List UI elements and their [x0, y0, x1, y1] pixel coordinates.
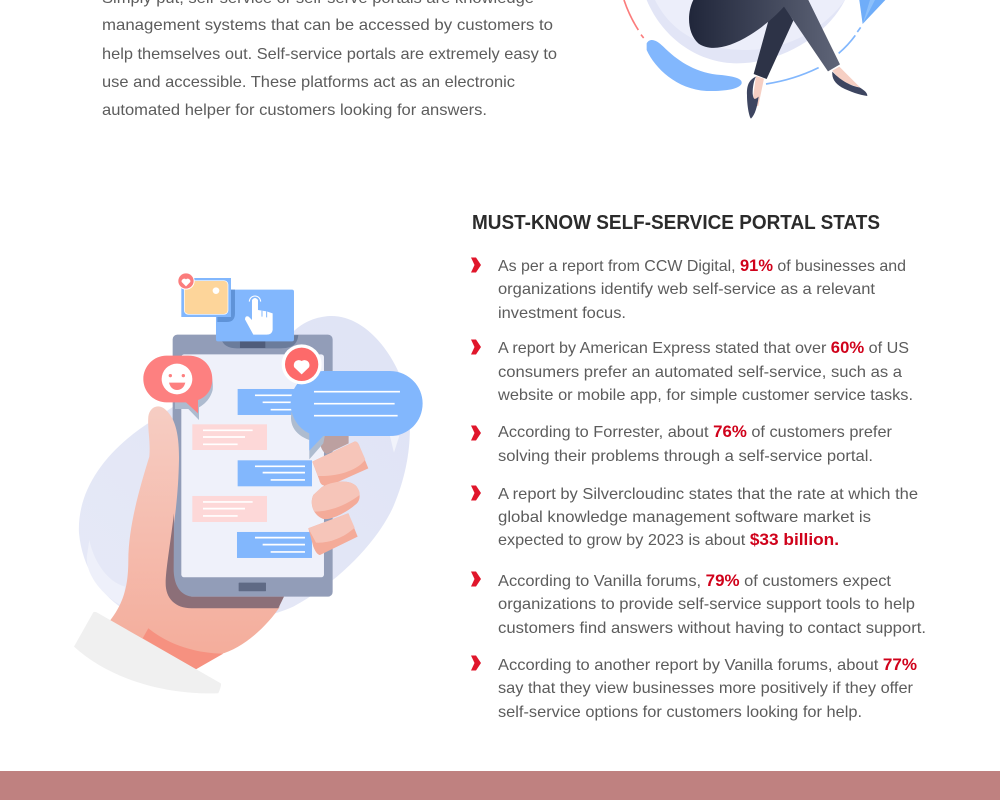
- blue message 1: [238, 389, 312, 415]
- stat: $33 billion: global knowledge management software market is: [498, 509, 871, 526]
- stat: 79%: [471, 572, 926, 637]
- sleeve: [74, 612, 221, 693]
- intro paragraph: management systems that can be accessed by customers to: [102, 17, 553, 34]
- back leg: [754, 5, 793, 79]
- stat: 60%: website or mobile app, for simple customer service tasks.: [497, 387, 913, 404]
- stat: 79%: customers find answers without having to contact support.: [498, 620, 926, 637]
- red orbit arc: [624, 0, 644, 38]
- phone body: [173, 335, 333, 597]
- pink message 1: [192, 424, 267, 450]
- top blue card with tap icon: [216, 290, 294, 341]
- intro paragraph: [102, 0, 557, 119]
- intro paragraph: use and accessible. These platforms act as an electronic: [102, 74, 515, 91]
- illustration: seated woman with orbit arcs: [624, 0, 885, 119]
- thigh and front leg: [689, 0, 840, 71]
- hand: [110, 406, 280, 669]
- top blue card shadow: [222, 335, 298, 348]
- stat: 76%: [471, 423, 893, 465]
- stat: 76%: solving their problems through a self-service portal.: [498, 448, 873, 465]
- stat: 60%: [471, 339, 913, 404]
- background blob: [79, 316, 410, 624]
- red top: [692, 0, 707, 12]
- bullet chevron: [471, 340, 481, 354]
- illustration: hand holding phone: [74, 272, 423, 693]
- blue chat bubble: [291, 371, 423, 451]
- stat: 60%: A report by American Express stated that over 60% of US: [498, 339, 909, 357]
- stat: 91%: organizations identify web self-service as a relevant: [498, 281, 876, 298]
- blue orbit arc: [766, 27, 861, 84]
- stat: 77%: self-service options for customers looking for help.: [498, 704, 862, 721]
- bullet chevron: [471, 486, 481, 500]
- bullet chevron: [471, 258, 481, 272]
- stat: 79%: organizations to provide self-service support tools to help: [498, 596, 915, 613]
- stat: 76%: According to Forrester, about 76% of customers prefer: [498, 423, 893, 441]
- paper plane: [859, 0, 885, 24]
- stat: 60%: consumers prefer an automated self-service, such as a: [498, 364, 902, 381]
- blue blob: [647, 40, 742, 91]
- stat: 77%: [471, 656, 917, 721]
- intro paragraph: help themselves out. Self-service portals are extremely easy to: [102, 46, 557, 63]
- stat: 77%: say that they view businesses more positively if they offer: [498, 680, 914, 697]
- red smile bubble shadow: [175, 360, 213, 420]
- red smile bubble: [143, 356, 212, 413]
- small heart badge: [177, 272, 195, 290]
- stat: 77%: According to another report by Vanilla forums, about 77%: [498, 656, 917, 674]
- finger behind bubble: [319, 435, 349, 454]
- stat: $33 billion: [471, 486, 918, 549]
- fingers: [308, 441, 368, 555]
- blue message 2: [238, 460, 312, 486]
- footer band: [0, 771, 1000, 800]
- blue message 3: [237, 532, 312, 558]
- hand shadow: [143, 628, 223, 669]
- photo card: [181, 278, 231, 317]
- right foot and shoe: [832, 67, 861, 88]
- stat: 79%: According to Vanilla forums, 79% of customers expect: [498, 572, 892, 590]
- pink message 2: [192, 496, 267, 522]
- phone screen: [181, 354, 324, 577]
- bullet chevron: [471, 656, 481, 670]
- left foot and shoe: [752, 76, 764, 107]
- stat: 91%: As per a report from CCW Digital, 91% of businesses and: [498, 257, 906, 275]
- stat: $33 billion: expected to grow by 2023 is about $33 billion.: [498, 530, 839, 549]
- stat: 91%: [471, 257, 906, 322]
- heading: MUST-KNOW SELF-SERVICE PORTAL STATS: [472, 212, 880, 234]
- lavender disc: [647, 0, 845, 63]
- stat: $33 billion: A report by Silvercloudinc states that the rate at which the: [498, 486, 918, 503]
- bullet chevron: [471, 426, 481, 440]
- blue bubble shadow: [291, 407, 327, 459]
- home button: [239, 583, 266, 591]
- bullet chevron: [471, 572, 481, 586]
- large heart badge: [282, 344, 322, 384]
- stat: 91%: investment focus.: [498, 305, 626, 322]
- phone shadow on palm: [166, 513, 284, 608]
- chat rows: [192, 389, 312, 558]
- intro paragraph: automated helper for customers looking for answers.: [102, 102, 487, 119]
